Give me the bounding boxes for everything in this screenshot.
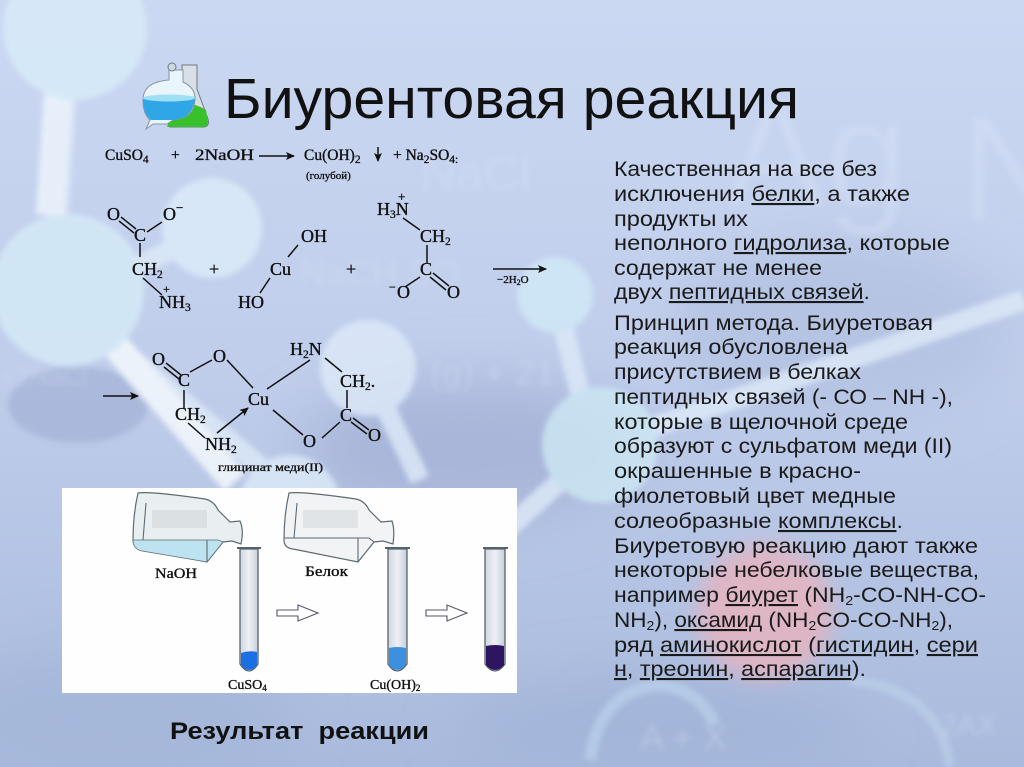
caption: reaction result: Результат реакции <box>170 718 429 745</box>
arrow: minus two water: −2H <box>497 274 517 286</box>
plus sign: + <box>346 259 356 279</box>
pink sphere <box>697 544 833 680</box>
copper hydroxide molecule: Cu <box>270 259 291 279</box>
text block: description: образуют с сульфатом меди (II) <box>614 435 952 458</box>
right glycine molecule: O <box>447 282 460 302</box>
product: copper glycinate: H <box>290 339 303 359</box>
text block: description: ), <box>654 609 674 632</box>
icon: laboratory flasks <box>143 63 208 129</box>
right glycine molecule: O <box>397 282 410 302</box>
text block: description: 2 <box>808 618 816 633</box>
product: copper glycinate: 2 <box>365 381 371 393</box>
equation: copper sulfate and sodium hydroxide: 2 <box>355 154 361 166</box>
equation: copper sulfate and sodium hydroxide: + <box>171 147 180 164</box>
title: Биурентовая реакция <box>224 67 799 131</box>
text block: description: Биуретовую реакцию дают также <box>614 535 978 558</box>
background: blurred molecule pattern: 2AX <box>940 709 997 742</box>
background: blurred molecule pattern: A + X <box>640 717 727 758</box>
equation: copper sulfate and sodium hydroxide: 2 <box>424 154 430 166</box>
test tube with copper hydroxide <box>385 548 410 671</box>
product: copper glycinate: CH <box>175 404 200 424</box>
equation: copper sulfate and sodium hydroxide: + Na <box>393 147 424 164</box>
label NaOH: NaOH <box>155 566 198 582</box>
hollow arrow <box>426 605 467 621</box>
test tube with violet result <box>483 548 508 671</box>
right glycine molecule: − <box>389 280 396 294</box>
left glycine molecule: 2 <box>157 269 163 281</box>
equation: copper sulfate and sodium hydroxide <box>105 147 458 182</box>
text block: description: реакция обусловлена <box>614 336 848 359</box>
right glycine molecule: CH <box>420 226 445 246</box>
background: blurred molecule pattern: (g) + 21 <box>430 352 555 393</box>
text block: description: н, треонин , аспарагин ). <box>614 658 866 681</box>
text block: description: -CO-NH-CO- <box>853 584 986 607</box>
caption: copper glycinate: глицинат меди(II) <box>218 462 323 474</box>
left glycine molecule: − <box>176 200 183 215</box>
text block: description: продукты их <box>614 208 749 231</box>
bottle with NaOH <box>133 493 242 562</box>
hollow arrow <box>277 605 318 621</box>
left glycine molecule: + <box>163 282 170 296</box>
left glycine molecule: O <box>163 204 176 224</box>
left glycine molecule: CH <box>132 259 157 279</box>
text block: description: 2 <box>931 618 939 633</box>
text block: description: NH <box>614 609 644 632</box>
bottle with protein <box>284 493 394 562</box>
text block: description: ), <box>939 609 953 632</box>
product: copper glycinate: N <box>309 339 322 359</box>
text block: description: CO-CO-NH <box>816 609 931 632</box>
left glycine molecule <box>107 200 191 314</box>
equation: copper sulfate and sodium hydroxide: CuSO <box>105 147 143 164</box>
product: copper glycinate: C <box>340 405 352 425</box>
product: copper glycinate: O <box>213 346 226 366</box>
text block: description: присутствием в белках <box>614 361 862 384</box>
text block: description: ряд аминокислот (гистидин , сери <box>614 634 978 657</box>
background: blurred molecule pattern: Ag <box>725 69 908 237</box>
product: copper glycinate: CH <box>340 371 365 391</box>
product: copper glycinate: C <box>178 370 190 390</box>
label CuSO4: 4 <box>262 683 267 693</box>
text block: description: 2 <box>845 593 853 608</box>
right glycine molecule: C <box>420 259 432 279</box>
arrow: minus two water: O <box>521 274 529 286</box>
product: copper glycinate <box>152 339 381 474</box>
label copper hydroxide: 2 <box>416 683 420 693</box>
product: copper glycinate: O <box>152 349 165 369</box>
equation: copper sulfate and sodium hydroxide: SO <box>429 147 449 164</box>
right glycine molecule: + <box>398 189 405 204</box>
product: copper glycinate: NH <box>205 434 231 454</box>
text block: description: двух пептидных связей . <box>614 281 870 304</box>
text block: description: Принцип метода. Биуретовая <box>614 312 933 335</box>
copper hydroxide molecule <box>238 226 327 312</box>
arrow: minus two water <box>493 269 546 287</box>
product: copper glycinate: . <box>371 371 375 391</box>
label protein: Белок <box>305 564 349 580</box>
copper hydroxide molecule: OH <box>301 226 327 246</box>
equation: copper sulfate and sodium hydroxide: Cu(OH) <box>304 147 355 164</box>
left glycine molecule: NH <box>159 292 185 312</box>
reaction arrow to product <box>103 395 138 397</box>
background: blurred molecule pattern: +2NaCl <box>0 361 87 391</box>
test tube with copper sulfate <box>237 548 261 671</box>
plus sign: + <box>209 259 219 279</box>
text block: description: например биурет (NH <box>614 584 841 607</box>
text block: description: Качественная на все без <box>614 158 877 181</box>
text block: description: пептидных связей (- СО – NH -), <box>614 386 953 409</box>
left glycine molecule: 3 <box>185 302 191 314</box>
product: copper glycinate: 2 <box>303 349 309 361</box>
text block: description <box>614 158 986 681</box>
text block: description: оксамид (NH <box>674 609 805 632</box>
right glycine molecule: 2 <box>445 236 451 248</box>
product: copper glycinate: O <box>368 425 381 445</box>
product: copper glycinate: 2 <box>231 444 237 456</box>
background: blurred molecule pattern: NaCl <box>420 145 531 201</box>
text block: description: фиолетовый цвет медные <box>614 485 896 508</box>
text block: description: некоторые небелковые вещества, <box>614 559 979 582</box>
right glycine molecule: H <box>377 199 390 219</box>
equation: copper sulfate and sodium hydroxide: (голубой) <box>306 170 351 182</box>
left glycine molecule: C <box>134 225 146 245</box>
equation: copper sulfate and sodium hydroxide: 4: <box>449 154 458 166</box>
right glycine molecule: N <box>396 199 409 219</box>
text block: description: содержат не менее <box>614 257 822 280</box>
left glycine molecule: O <box>107 204 120 224</box>
reaction: glycine plus copper hydroxide <box>107 189 546 314</box>
right glycine molecule <box>377 189 460 302</box>
text block: description: 2 <box>647 618 654 633</box>
label CuSO4: CuSO <box>228 678 262 693</box>
copper hydroxide molecule: HO <box>238 292 264 312</box>
background: blurred molecule pattern: NaCH SO <box>300 252 460 293</box>
equation: copper sulfate and sodium hydroxide: 2NaOH <box>195 147 254 164</box>
product: copper glycinate: O <box>303 431 316 451</box>
right glycine molecule: 3 <box>390 209 396 221</box>
arrow: minus two water: 2 <box>517 278 521 287</box>
product: copper glycinate: Cu <box>248 389 269 409</box>
text block: description: исключения белки , а также <box>614 183 910 206</box>
text block: description: окрашенные в красно- <box>614 460 861 483</box>
label copper hydroxide: Cu(OH) <box>370 678 416 693</box>
text block: description: солеобразные комплексы . <box>614 510 903 533</box>
text block: description: которые в щелочной среде <box>614 411 908 434</box>
text block: description: неполного гидролиза , которые <box>614 232 950 255</box>
product: copper glycinate: 2 <box>200 414 206 426</box>
equation: copper sulfate and sodium hydroxide: 4 <box>143 154 149 166</box>
photo panel: test tube experiment <box>62 488 517 693</box>
